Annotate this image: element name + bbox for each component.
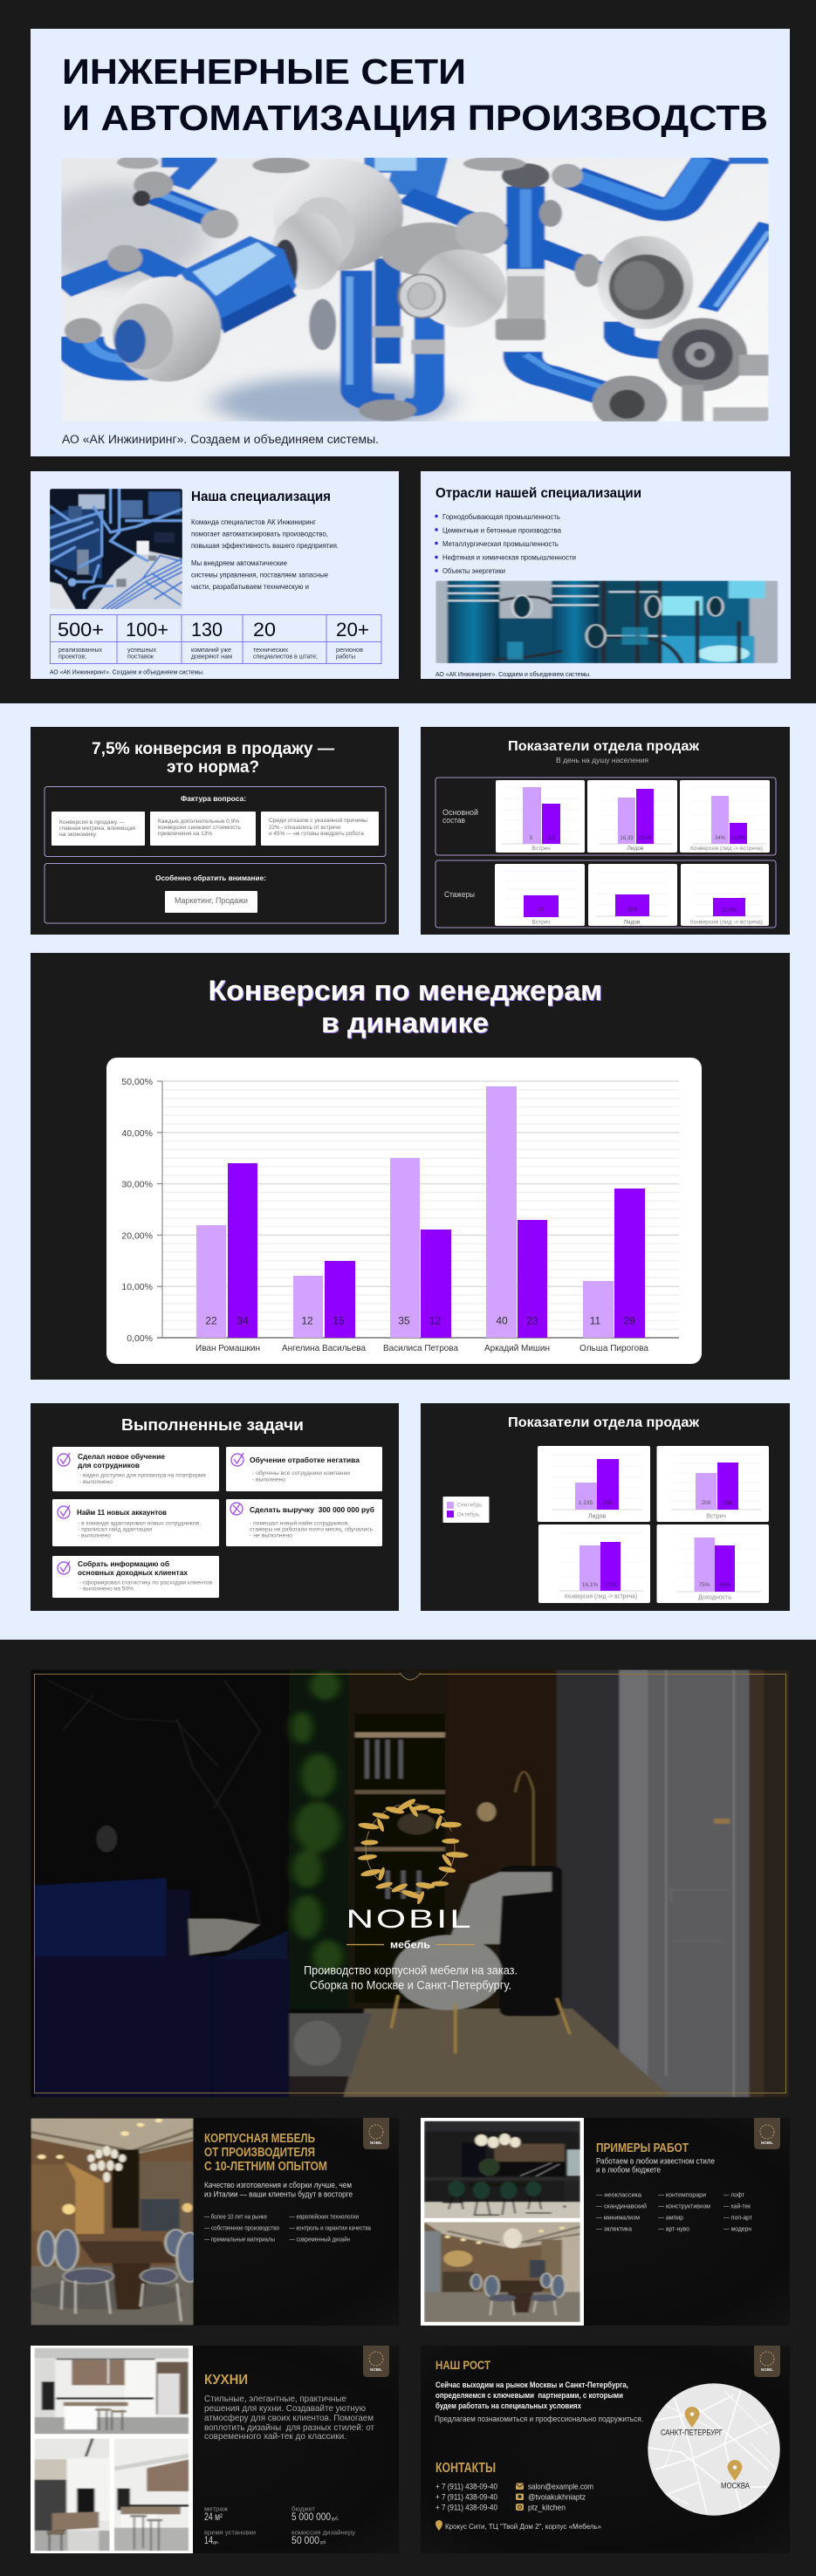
task card 1: - выполнено: [79, 1479, 113, 1485]
heading: ОТ ПРОИЗВОДИТЕЛЯ: [204, 2146, 315, 2160]
project stats: 5 000 000: [291, 2512, 331, 2523]
chart card: [106, 1058, 702, 1364]
stats table: 500+: [58, 619, 104, 641]
chart: conversion: 22,6%: [722, 908, 737, 914]
panel: kitchens: [31, 2346, 399, 2553]
stats table: 100+: [126, 619, 168, 641]
text block: growth: определяемся с ключевыми партнерами, с которыми: [435, 2391, 623, 2400]
text block: Работаем в любом известном стиле: [596, 2157, 715, 2166]
logo badge: [754, 2118, 780, 2149]
heading: [204, 2132, 327, 2174]
section background: light sales: [0, 703, 816, 1640]
social list: ptz_kitchen: [528, 2503, 566, 2513]
bar values: [205, 1314, 635, 1326]
manager names: Василиса Петрова: [383, 1343, 458, 1353]
bars: [196, 1086, 645, 1338]
chart: profitability: 75%: [698, 1582, 710, 1588]
image frame: [421, 2118, 584, 2326]
chart: meetings: 3,5: [548, 836, 556, 841]
chart: meetings: [496, 780, 585, 853]
chart: conversion: 34%: [715, 836, 726, 841]
project stats: метраж: [204, 2504, 228, 2513]
task card 4: - не выполнено: [250, 1532, 292, 1539]
project stats: 14: [204, 2536, 213, 2546]
task card 3: Найм 11 новых аккаунтов: [77, 1508, 167, 1517]
manager names: Аркадий Мишин: [484, 1343, 550, 1353]
stats table: технических: [253, 647, 289, 654]
y axis labels: [121, 1077, 153, 1344]
text block: Команда специалистов АК Инжиниринг: [191, 517, 316, 526]
style list: — контемпорари: [658, 2190, 706, 2199]
project stats: время установки: [204, 2529, 256, 2536]
text block: [204, 2394, 374, 2442]
chart: meetings: 5: [530, 836, 533, 841]
row: main staff: состав: [442, 816, 465, 825]
heading: Конверсия по менеджерам: [208, 975, 602, 1006]
chart: meetings: Встреч: [532, 846, 550, 852]
chart: conversion: Конверсия (лид -> встреча): [690, 920, 763, 925]
project stats: комиссия дизайнеру: [291, 2529, 355, 2536]
box: question facts: конверсии снижают стоимость: [158, 825, 242, 831]
text block: решения для кухни. Создавайте уютную: [204, 2403, 366, 2414]
bullet list: Объекты энергетики: [442, 566, 505, 575]
task card 4: Сделать выручку 300 000 000 руб: [250, 1505, 374, 1514]
box: question facts: главная метрика, влияющая: [59, 826, 135, 832]
feature list: [204, 2213, 371, 2243]
row: trainees: Стажеры: [444, 890, 475, 899]
stats table: регионов: [336, 647, 363, 654]
chart: leads: Лидов: [624, 920, 641, 925]
text block: growth: Предлагаем познакомиться и профессионально подружиться.: [435, 2415, 643, 2423]
style list: — минимализм: [596, 2213, 640, 2222]
social list: [528, 2482, 593, 2513]
task card 3: - прописал гайд адаптации: [78, 1525, 152, 1532]
chart: leads: 1 235: [579, 1500, 593, 1506]
footer note: АО «АК Инжиниринг». Создаем и объединяем системы.: [435, 670, 591, 678]
text block: Качество изготовления и сборки лучше, чем: [204, 2181, 352, 2190]
box: question facts: на экономику: [59, 832, 97, 838]
style list: — скандинавский: [596, 2203, 647, 2209]
logo badge: NOBIL: [761, 2367, 773, 2372]
style list: — неоклассика: [596, 2190, 642, 2199]
task card 3: - в команде адаптировал новых сотрудников: [78, 1520, 200, 1527]
tagline: Сборка по Москве и Санкт-Петербургу.: [310, 1979, 511, 1991]
stats table: специалистов в штате;: [253, 654, 318, 660]
image: white kitchen overview: [34, 2348, 189, 2434]
stats table: компаний уже: [191, 647, 231, 654]
legend: Сентябрь: [457, 1501, 483, 1508]
y axis labels: 0,00%: [127, 1333, 153, 1344]
marker: Moscow: [721, 2460, 751, 2490]
logo badge: [754, 2346, 780, 2377]
feature list: — современный дизайн: [290, 2236, 350, 2243]
task card 1: Сделал новое обучение: [78, 1452, 165, 1461]
social list: salon@example.com: [528, 2482, 593, 2492]
task card 2: - выполнено: [252, 1476, 285, 1483]
project stats: дн.: [213, 2540, 219, 2545]
heading: growth: НАШ РОСТ: [435, 2358, 490, 2372]
phone list: + 7 (911) 438-09-40: [435, 2492, 497, 2503]
text block: системы управления, поставляем запасные: [191, 571, 328, 579]
task card 1: для сотрудников: [78, 1461, 140, 1470]
bar values: 12: [301, 1314, 313, 1326]
chart: meetings: Встреч: [706, 1513, 726, 1520]
style list: [596, 2190, 753, 2232]
style list: — лофт: [723, 2190, 744, 2199]
style list: — арт-нуво: [658, 2225, 689, 2232]
legend: Октябрь: [457, 1511, 480, 1518]
panel: completed tasks: [31, 1403, 399, 1611]
text block: помогает автоматизировать производство,: [191, 529, 328, 538]
heading: [92, 740, 334, 777]
manager names: Ангелина Васильева: [282, 1343, 366, 1353]
feature list: — премиальные материалы: [204, 2237, 275, 2243]
panel: conversion question: [31, 727, 399, 935]
chart: conversion: [680, 780, 770, 853]
y axis labels: 10,00%: [121, 1282, 153, 1292]
panel: our specialization: [31, 471, 399, 679]
icon: address pin: [435, 2520, 442, 2531]
task card 5: Собрать информацию об: [78, 1559, 169, 1568]
decorative gold frame: [35, 1674, 785, 2093]
box: question facts: Среди отказов с указанной причины: [269, 817, 367, 824]
panel: conversion by managers: [31, 953, 790, 1380]
text block: части, разрабатываем техническую и: [191, 582, 309, 591]
feature list: — контроль и гарантии качества: [290, 2225, 371, 2232]
project stats: руб.: [320, 2540, 326, 2545]
box: question facts: [45, 787, 386, 857]
task card 4: - помешал новый найм сотрудников,: [250, 1520, 349, 1527]
heading: Показатели отдела продаж: [508, 739, 700, 754]
box: question facts: и 45% — не готовы внедрять робота: [269, 830, 364, 837]
phone list: [435, 2482, 497, 2513]
heading: Показатели отдела продаж: [508, 1415, 700, 1430]
chart: meetings: 256: [723, 1500, 733, 1506]
text block: growth: [435, 2381, 643, 2423]
chart: conversion: Конверсия (лид -> встреча): [690, 846, 763, 852]
image: blue and silver pipes: [31, 155, 769, 429]
task card 2: Обучение отработке негатива: [250, 1456, 360, 1464]
panel: work examples: [421, 2118, 790, 2326]
tagline: [304, 1963, 518, 1991]
bullet list: Нефтяная и химическая промышленности: [442, 553, 576, 562]
phone list: + 7 (911) 438-09-40: [435, 2482, 497, 2492]
bullet list: Цементные и бетонные производства: [442, 525, 561, 534]
task card 5: основных доходных клиентах: [78, 1568, 188, 1577]
legend: [443, 1497, 489, 1523]
marker: Saint Petersburg: [661, 2407, 723, 2438]
chart: leads: [538, 1446, 650, 1522]
y axis labels: 50,00%: [121, 1077, 153, 1087]
row: main staff: [435, 778, 776, 855]
logo: golden wreath: [358, 1797, 469, 1905]
stats table: 20: [253, 619, 276, 641]
text block: Мы внедряем автоматические: [191, 558, 287, 567]
row: trainees: [435, 860, 776, 928]
title: И АВТОМАТИЗАЦИЯ ПРОИЗВОДСТВ: [62, 98, 768, 138]
text block: современного хай-тек до классики.: [204, 2431, 346, 2442]
marker: Moscow: МОСКВА: [721, 2482, 751, 2490]
feature list: — европейских технологии: [290, 2213, 359, 2220]
heading: КОРПУСНАЯ МЕБЕЛЬ: [204, 2132, 315, 2146]
image: dark interior: [31, 1669, 790, 2097]
task card 2: - обучены все сотрудники компании: [252, 1470, 350, 1476]
section background: dark furniture: [0, 1640, 816, 2576]
heading: в динамике: [321, 1007, 489, 1038]
manager names: Иван Ромашкин: [195, 1343, 260, 1353]
logo badge: NOBIL: [761, 2141, 773, 2145]
stats table: 130: [191, 619, 223, 641]
panel: industries: [421, 471, 791, 679]
text block: growth: будем работать на специальных условиях: [435, 2401, 581, 2410]
title: [62, 51, 768, 138]
box: attention: Маркетинг, Продажи: [175, 896, 248, 905]
task card 1: [52, 1447, 219, 1491]
logo badge: NOBIL: [370, 2367, 382, 2372]
image: teal industrial pipes: [435, 580, 778, 663]
heading: Наша специализация: [191, 490, 331, 504]
panel: cabinet furniture: [26, 2118, 399, 2326]
task card 5: - выполнено на 50%: [79, 1586, 134, 1592]
stats table: поставок: [127, 654, 154, 660]
logo wordmark: NOBIL: [346, 1905, 473, 1934]
image: dark kitchen: [424, 2121, 580, 2218]
text block: [596, 2157, 715, 2175]
logo badge: NOBIL: [370, 2141, 382, 2145]
bar values: 23: [526, 1314, 538, 1326]
task card 2: [226, 1447, 382, 1491]
text block: Стильные, элегантные, практичные: [204, 2394, 346, 2404]
style list: — эклектика: [596, 2225, 633, 2232]
chart: leads: 16,33: [620, 836, 634, 841]
phone list: + 7 (911) 438-09-40: [435, 2503, 497, 2513]
chart: meetings: [495, 864, 585, 926]
heading: ПРИМЕРЫ РАБОТ: [596, 2141, 689, 2155]
chart: conversion: 17%: [605, 1582, 616, 1588]
text block: повышая эффективность вашего предприятия.: [191, 541, 339, 550]
heading: 7,5% конверсия в продажу —: [92, 740, 334, 758]
y axis labels: 30,00%: [121, 1180, 153, 1190]
style list: — модерн: [723, 2225, 751, 2232]
box: question facts: Фактура вопроса:: [181, 794, 246, 803]
bar values: 34: [237, 1314, 249, 1326]
text block: и в любом бюджете: [596, 2166, 661, 2175]
task card 3: - выполнено: [78, 1532, 111, 1539]
map: [648, 2383, 781, 2516]
marker: Saint Petersburg: САНКТ-ПЕТЕРБУРГ: [661, 2428, 723, 2438]
task card 1: - видео доступно для просмотра на платформе: [79, 1473, 206, 1478]
chart: conversion: 14,6%: [730, 836, 746, 841]
task card 4: стажеры не работали почти месяц, обучались: [250, 1525, 374, 1532]
panel: NOBIL hero slide: [31, 1669, 790, 2097]
text block: атмосферу для своих клиентов. Помогаем: [204, 2413, 374, 2423]
image: blue circuit board: [50, 489, 182, 609]
text block: из Италии — ваши клиенты будут в восторге: [204, 2190, 353, 2199]
heading: contacts: КОНТАКТЫ: [435, 2461, 496, 2476]
social list: @tvoiakukhniaptz: [528, 2492, 586, 2503]
task card 5: [52, 1556, 219, 1598]
chart: leads: 19,8: [627, 908, 638, 913]
panel: sales indicators daily: [421, 727, 790, 935]
task card 5: - сформировал статистику по расходам клиентов: [79, 1579, 213, 1586]
social icons: [516, 2484, 524, 2511]
heading: [208, 975, 602, 1038]
y axis labels: 40,00%: [121, 1128, 153, 1139]
row: main staff: Основной: [442, 808, 478, 817]
logo badge: [363, 2346, 389, 2377]
icon: frame notch: [400, 1673, 421, 1680]
y axis labels: 20,00%: [121, 1230, 153, 1241]
bar values: 11: [590, 1314, 601, 1326]
text block: growth: Сейчас выходим на рынок Москвы и Санкт-Петербурга,: [435, 2381, 628, 2389]
stats table: реализованных: [58, 647, 102, 654]
logo subtitle: мебель: [390, 1941, 430, 1951]
bar values: 35: [398, 1314, 410, 1326]
chart: leads: [587, 780, 677, 853]
bar values: 29: [623, 1314, 635, 1326]
project stats: руб.: [332, 2517, 339, 2522]
box: question facts: привлечения на 13%: [158, 831, 212, 837]
box: question facts: 22% - отказались от встречи: [269, 825, 340, 831]
task card 3: [52, 1499, 219, 1546]
panel: engineering hero slide: [31, 29, 790, 456]
logo badge: [363, 2118, 389, 2149]
chart: conversion: [538, 1524, 650, 1603]
chart: leads: 19,44: [638, 836, 652, 841]
chart: profitability: Доходность: [698, 1595, 731, 1600]
text block: [204, 2181, 353, 2199]
text block: воплотить дизайны для разных стилей: от: [204, 2422, 374, 2433]
style list: — конструктивизм: [658, 2203, 710, 2209]
bar values: 15: [333, 1314, 345, 1326]
task card 4: [226, 1499, 382, 1546]
heading: КУХНИ: [204, 2373, 248, 2388]
chart: meetings: 12: [538, 908, 545, 913]
feature list: — собственное производство: [204, 2225, 279, 2232]
chart: profitability: [656, 1524, 769, 1603]
heading: Отрасли нашей специализации: [435, 486, 641, 501]
chart: leads: [588, 864, 677, 926]
chart: conversion: 16,1%: [582, 1582, 598, 1588]
box: question facts: Каждые дополнительные 0,9%: [158, 819, 239, 825]
footer note: АО «АК Инжиниринг». Создаем и объединяем системы.: [50, 668, 204, 675]
chart: leads: 230: [603, 1500, 613, 1506]
heading: это норма?: [167, 758, 259, 777]
chart: conversion: [681, 864, 769, 926]
image: dining room: [26, 2118, 203, 2326]
style list: — хай-тек: [723, 2203, 751, 2209]
manager names: Ольша Пирогова: [579, 1343, 648, 1353]
chart: leads: Лидов: [588, 1513, 606, 1520]
box: attention: Особенно обратить внимание:: [155, 874, 266, 882]
chart: conversion: Конверсия (лид -> встреча): [565, 1593, 637, 1600]
stats table: проектов;: [58, 654, 86, 660]
bar values: 12: [429, 1314, 441, 1326]
chart: meetings: [656, 1446, 769, 1522]
heading: С 10-ЛЕТНИМ ОПЫТОМ: [204, 2160, 327, 2174]
chart: meetings: 200: [702, 1500, 711, 1506]
panel: growth and contacts: [421, 2346, 790, 2553]
project stats: бюджет: [291, 2504, 316, 2513]
tagline: Проиводство корпусной мебели на заказ.: [304, 1963, 518, 1977]
caption: АО «АК Инжиниринг». Создаем и объединяем системы.: [62, 433, 379, 446]
image: dining room with mirror: [424, 2222, 580, 2322]
bullet list: Металлургическая промышленность: [442, 539, 559, 548]
manager names: [195, 1343, 648, 1353]
chart: meetings: Встреч: [532, 920, 550, 925]
stats table: доверяют нам: [191, 654, 232, 660]
bullet list: Горнодобывающая промышленность: [442, 512, 561, 521]
bar values: 22: [205, 1314, 217, 1326]
bar values: 40: [496, 1314, 508, 1326]
section background: dark engineering: [0, 0, 816, 703]
style list: — ампир: [658, 2213, 683, 2222]
address: Крокус Сити, ТЦ "Твой Дом 2", корпус «Мебель»: [445, 2522, 601, 2531]
chart: profitability: 64%: [719, 1582, 730, 1588]
bullet list: [435, 512, 576, 575]
stats table: [51, 614, 381, 663]
project stats: 24 м²: [204, 2512, 223, 2523]
panel: sales indicators by month: [421, 1403, 790, 1611]
style list: — поп-арт: [723, 2213, 753, 2222]
box: question facts: Конверсия в продажу —: [59, 819, 126, 826]
subheading: В день на душу населения: [556, 756, 648, 764]
stats table: 20+: [336, 619, 369, 641]
text block: [191, 517, 339, 591]
image: tall cabinets: [34, 2438, 110, 2551]
feature list: — более 10 лет на рынке: [204, 2213, 267, 2220]
stats table: работы: [336, 653, 355, 660]
chart: leads: Лидов: [627, 846, 644, 852]
box: attention: [45, 864, 386, 923]
stats table: успешных: [127, 647, 156, 654]
title: ИНЖЕНЕРНЫЕ СЕТИ: [62, 51, 466, 92]
project stats: 50 000: [291, 2536, 319, 2546]
image: island and stools: [114, 2438, 189, 2551]
project stats: [204, 2504, 355, 2546]
heading: Выполненные задачи: [121, 1416, 304, 1434]
image frame: [31, 2346, 193, 2553]
